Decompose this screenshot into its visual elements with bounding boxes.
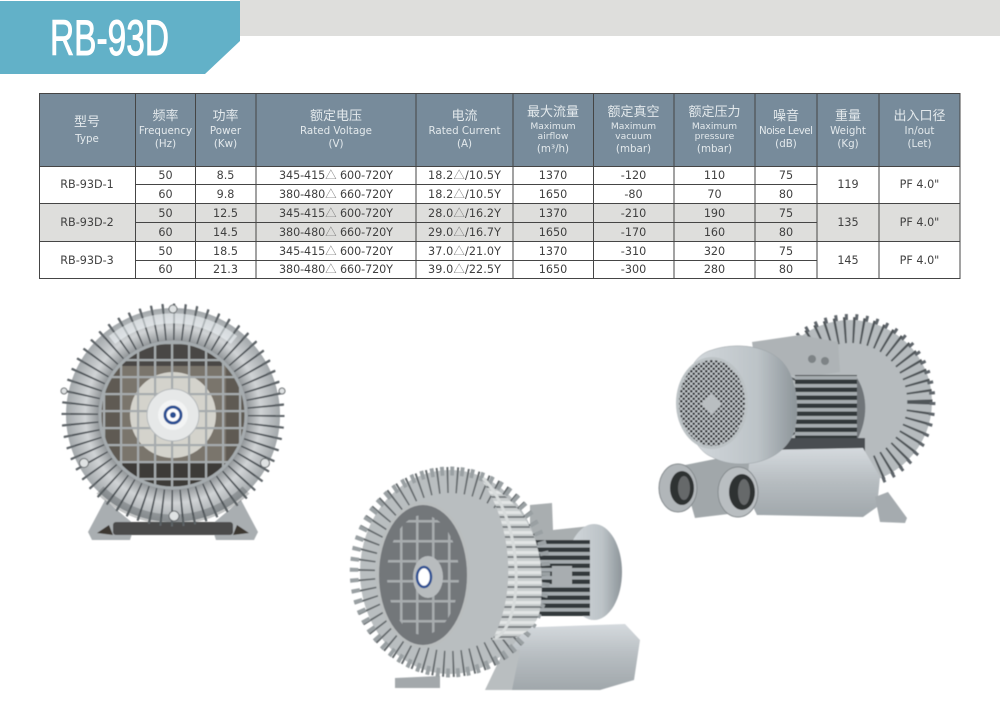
header: maximum vacuum: 额定真空 bbox=[607, 101, 660, 120]
header: in/out: In/out bbox=[905, 125, 934, 137]
row group RB-93D-3: 50 bbox=[158, 245, 173, 258]
header: maximum vacuum bbox=[607, 101, 660, 155]
header: frequency: 频率 bbox=[152, 105, 179, 124]
header: frequency bbox=[139, 105, 192, 150]
row group RB-93D-3: 60 bbox=[158, 263, 173, 276]
row group RB-93D-1: 80 bbox=[779, 188, 793, 201]
row group RB-93D-1: 60 bbox=[158, 188, 173, 201]
row group RB-93D-2: 60 bbox=[158, 226, 173, 239]
row group RB-93D-1: 9.8 bbox=[217, 188, 234, 201]
header: maximum pressure: 额定压力 bbox=[688, 101, 741, 120]
row group RB-93D-1: 18.2△/10.5Y bbox=[428, 167, 501, 183]
header: type bbox=[74, 111, 100, 145]
header: maximum airflow bbox=[527, 101, 579, 155]
row group RB-93D-2: 160 bbox=[704, 226, 725, 239]
header: noise level: 噪音 bbox=[773, 105, 799, 124]
face grille bbox=[376, 502, 470, 648]
row group RB-93D-1: -80 bbox=[624, 188, 643, 201]
row group RB-93D-2: 75 bbox=[779, 207, 793, 220]
motor ribs bbox=[775, 375, 865, 456]
header: power: 功率 bbox=[212, 105, 239, 124]
header: rated voltage: 额定电压 bbox=[310, 105, 362, 124]
row group RB-93D-3: 320 bbox=[704, 245, 725, 258]
row group RB-93D-2: 12.5 bbox=[213, 207, 238, 220]
grille bbox=[100, 342, 246, 488]
motor bbox=[530, 503, 622, 620]
row group RB-93D-3: 80 bbox=[779, 263, 793, 276]
header: in/out: 出入口径 bbox=[893, 105, 946, 124]
row group RB-93D-2: 29.0△/16.7Y bbox=[428, 224, 501, 240]
header: maximum airflow: Maximum bbox=[530, 121, 576, 132]
header: rated current: (A) bbox=[457, 138, 472, 150]
row group RB-93D-3: 280 bbox=[704, 263, 725, 276]
row group RB-93D-3: 18.5 bbox=[213, 245, 238, 258]
fan housing bbox=[768, 317, 932, 487]
row group RB-93D-3 bbox=[60, 243, 939, 277]
row group RB-93D-2: RB-93D-2 bbox=[60, 216, 114, 229]
air port right bbox=[718, 467, 758, 517]
header: maximum vacuum: (mbar) bbox=[616, 143, 651, 155]
row group RB-93D-1: -120 bbox=[621, 169, 646, 182]
row group RB-93D-3: -310 bbox=[621, 245, 646, 258]
table data bbox=[60, 167, 939, 277]
row group RB-93D-2: 190 bbox=[704, 207, 725, 220]
row group RB-93D-1 bbox=[60, 167, 939, 202]
photo: blower front view bbox=[61, 305, 285, 540]
row group RB-93D-3: 1370 bbox=[539, 245, 567, 258]
header: power: Power bbox=[210, 125, 242, 137]
row group RB-93D-3: -300 bbox=[621, 263, 646, 276]
row group RB-93D-2: 28.0△/16.2Y bbox=[428, 205, 501, 221]
row group RB-93D-2: 80 bbox=[779, 226, 793, 239]
header: maximum pressure: pressure bbox=[695, 131, 735, 142]
air port left bbox=[659, 464, 697, 512]
row group RB-93D-1: 50 bbox=[158, 169, 173, 182]
header: rated voltage bbox=[300, 105, 372, 150]
row group RB-93D-3: 1650 bbox=[539, 263, 567, 276]
table header row bbox=[39, 93, 960, 166]
top grey bar bbox=[240, 0, 1000, 36]
row group RB-93D-2: 1370 bbox=[539, 207, 567, 220]
row group RB-93D-1: 18.2△/10.5Y bbox=[428, 186, 501, 202]
header: type: Type bbox=[74, 133, 99, 145]
photo: blower three-quarter view with motor bbox=[354, 470, 640, 690]
title: RB-93D bbox=[50, 10, 169, 66]
title banner bbox=[0, 1, 240, 74]
hub bbox=[413, 556, 443, 598]
row group RB-93D-1: 110 bbox=[704, 169, 725, 182]
row group RB-93D-2: 135 bbox=[837, 216, 859, 229]
row group RB-93D-1: 8.5 bbox=[217, 169, 234, 182]
header: rated current bbox=[428, 105, 501, 150]
header: frequency: (Hz) bbox=[155, 138, 176, 150]
row group RB-93D-3: 345-415△ 600-720Y bbox=[279, 243, 393, 259]
junction box bbox=[752, 335, 840, 378]
row group RB-93D-2: 50 bbox=[158, 207, 173, 220]
duct bbox=[395, 624, 640, 690]
header: maximum pressure bbox=[688, 101, 741, 155]
row group RB-93D-3: 21.3 bbox=[213, 263, 238, 276]
header: rated current: 电流 bbox=[451, 105, 478, 124]
feet bbox=[88, 500, 258, 540]
header: noise level: (dB) bbox=[775, 138, 797, 150]
header: rated voltage: (V) bbox=[328, 138, 344, 150]
row group RB-93D-2: 345-415△ 600-720Y bbox=[279, 205, 393, 221]
row group RB-93D-1: 1370 bbox=[539, 169, 567, 182]
row group RB-93D-2: 1650 bbox=[539, 226, 567, 239]
photo: blower rear view with motor cover bbox=[659, 317, 932, 523]
fins bbox=[66, 308, 280, 522]
row group RB-93D-2: PF 4.0" bbox=[900, 216, 939, 229]
row group RB-93D-2: 380-480△ 660-720Y bbox=[279, 224, 393, 240]
header: maximum pressure: Maximum bbox=[692, 121, 737, 132]
header: maximum vacuum: vacuum bbox=[615, 131, 652, 142]
header: maximum airflow: 最大流量 bbox=[527, 101, 579, 120]
header: weight: (Kg) bbox=[837, 138, 859, 150]
header: noise level bbox=[759, 105, 813, 150]
header: weight: 重量 bbox=[835, 105, 861, 124]
row group RB-93D-1: 119 bbox=[837, 178, 859, 191]
header: maximum airflow: airflow bbox=[538, 131, 569, 142]
header: power bbox=[210, 105, 242, 150]
row group RB-93D-3: RB-93D-3 bbox=[60, 254, 114, 267]
header: maximum pressure: (mbar) bbox=[697, 143, 732, 155]
row group RB-93D-1: 345-415△ 600-720Y bbox=[279, 167, 393, 183]
header: weight bbox=[830, 105, 866, 150]
row group RB-93D-1: 1650 bbox=[539, 188, 567, 201]
duct bbox=[680, 448, 907, 523]
row group RB-93D-3: 37.0△/21.0Y bbox=[428, 243, 501, 259]
header: weight: Weight bbox=[830, 125, 866, 137]
row group RB-93D-3: 380-480△ 660-720Y bbox=[279, 261, 393, 277]
fins bbox=[354, 470, 546, 674]
motor cover bbox=[676, 346, 797, 464]
grey band for RB-93D-2 bbox=[39, 203, 960, 241]
row group RB-93D-1: 380-480△ 660-720Y bbox=[279, 186, 393, 202]
hub bbox=[147, 389, 199, 441]
row group RB-93D-1: RB-93D-1 bbox=[60, 178, 114, 191]
header: in/out bbox=[893, 105, 946, 150]
specification table bbox=[39, 93, 960, 279]
row group RB-93D-3: PF 4.0" bbox=[900, 254, 939, 267]
row group RB-93D-2: -210 bbox=[621, 207, 646, 220]
row group RB-93D-2 bbox=[60, 205, 939, 240]
bolts bbox=[61, 305, 285, 521]
row group RB-93D-3: 145 bbox=[837, 254, 859, 267]
header: noise level: Noise Level bbox=[759, 125, 813, 137]
header: frequency: Frequency bbox=[139, 125, 192, 137]
header: maximum airflow: (m³/h) bbox=[537, 143, 569, 155]
header: power: (Kw) bbox=[214, 138, 237, 150]
header: rated current: Rated Current bbox=[428, 125, 501, 137]
row group RB-93D-1: PF 4.0" bbox=[900, 178, 939, 191]
header: maximum vacuum: Maximum bbox=[611, 121, 656, 132]
row group RB-93D-3: 39.0△/22.5Y bbox=[428, 261, 501, 277]
row group RB-93D-2: 14.5 bbox=[213, 226, 238, 239]
row group RB-93D-1: 70 bbox=[707, 188, 722, 201]
row group RB-93D-1: 75 bbox=[779, 169, 793, 182]
row group RB-93D-2: -170 bbox=[621, 226, 646, 239]
row group RB-93D-3: 75 bbox=[779, 245, 793, 258]
header: type: 型号 bbox=[74, 111, 100, 130]
header: rated voltage: Rated Voltage bbox=[300, 125, 372, 137]
header: in/out: (Let) bbox=[908, 138, 931, 150]
